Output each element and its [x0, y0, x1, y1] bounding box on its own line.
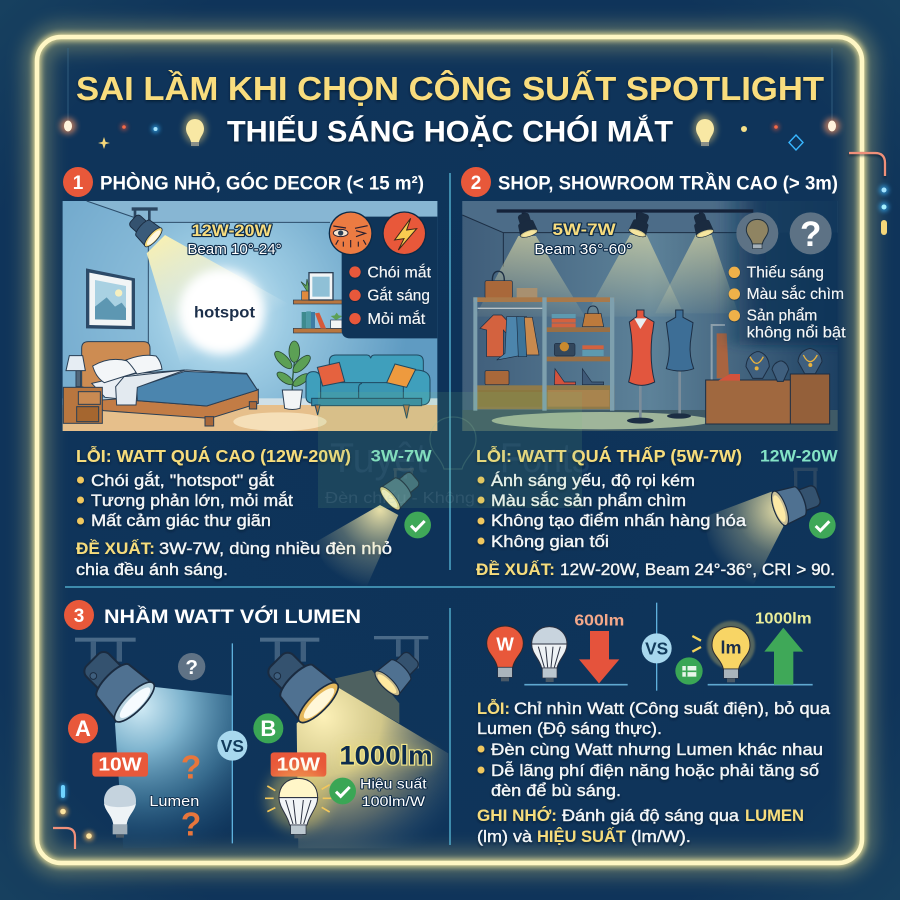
decorations: lights around title: [60, 48, 840, 150]
comparison illustration A vs B: [68, 636, 448, 848]
illustration: recommended spotlight 3W-7W: 3W-7W: [371, 447, 432, 466]
panel: section 2 shop: [64, 167, 858, 848]
text block: section 1 error and recommendation: [76, 445, 392, 579]
list: glare effects: Mỏi mắt: [367, 309, 426, 328]
sofa: [306, 355, 430, 418]
badge: 10W B: [271, 752, 326, 777]
text block: section 3 error and reminder: LỖI:: [477, 699, 510, 718]
badge: B: [253, 713, 283, 743]
illustration: recommended spotlight 3W-7W: [313, 447, 432, 587]
text block: section 3 error and reminder: HIỆU SUẤT: [537, 827, 627, 846]
watermark: Đèn chiếu - Không: [325, 490, 475, 507]
list: glare effects: [349, 262, 432, 328]
illustration: recommended spotlight 12W-20W: 12W-20W: [760, 447, 838, 466]
text block: section 2 error and recommendation: 12W-20W, Beam 24°-36°, CRI > 90.: [560, 560, 835, 579]
list: under-lighting effects: Màu sắc chìm: [747, 284, 844, 303]
badge: A: [68, 713, 98, 743]
decorations: right neon: [849, 153, 889, 235]
icon: grey bulb: [104, 785, 136, 838]
icon: bright bulb with rays: [265, 767, 331, 838]
heading: section 3: [64, 600, 361, 630]
divider lines: [65, 173, 835, 845]
heading: section 2: SHOP, SHOWROOM TRẦN CAO (> 3m): [498, 172, 838, 194]
heading: section 3: 3: [74, 606, 84, 627]
mannequin in red dress: [627, 310, 655, 424]
badge: VS: [217, 731, 247, 761]
text block: section 1 error and recommendation: chia đều ánh sáng.: [76, 560, 228, 579]
badge: VS: [642, 633, 672, 663]
label: 1000lm: 1000lm: [755, 610, 812, 627]
illustration: recommended spotlight 12W-20W: [703, 447, 838, 588]
title: THIẾU SÁNG HOẶC CHÓI MẮT: [227, 114, 673, 148]
label: wattage and beam: 12W-20W: [192, 221, 272, 240]
badge: A: A: [75, 716, 91, 741]
text block: section 3 error and reminder: Đánh giá độ sáng qua: [562, 806, 740, 825]
bedside table with lamp: [63, 356, 102, 423]
heading: section 3: NHẦM WATT VỚI LUMEN: [104, 606, 361, 628]
text block: section 1 error and recommendation: LỖI: WATT QUÁ CAO (12W-20W): [76, 445, 351, 466]
picture on wall: [86, 268, 135, 329]
text block: section 2 error and recommendation: Không tạo điểm nhấn hàng hóa: [491, 511, 747, 530]
badge: B: B: [260, 716, 276, 741]
text block: section 3 error and reminder: Lumen (Độ sáng thực).: [477, 719, 662, 738]
list: glare effects: Chói mắt: [367, 262, 432, 281]
panel: section 1 small room: [63, 167, 858, 848]
text block: section 3 error and reminder: Chỉ nhìn Watt (Công suất điện), bỏ qua: [514, 699, 831, 718]
label: wattage and beam: [534, 220, 632, 258]
text block: section 3 error and reminder: (lm/W).: [631, 827, 691, 846]
text block: section 3 error and reminder: Dễ lãng phí điện năng hoặc phải tăng số: [491, 761, 820, 780]
question marks: ?: [181, 749, 201, 786]
watermark: Tuyệt: [330, 434, 427, 481]
badge: 10W B: 10W: [277, 753, 320, 774]
heading: section 1: PHÒNG NHỎ, GÓC DECOR (< 15 m²): [100, 172, 424, 194]
badge: 10W A: [92, 752, 148, 777]
overlay: fade right: [720, 201, 838, 350]
text block: section 2 error and recommendation: ĐỀ XUẤT:: [476, 560, 555, 579]
list: glare effects: Gắt sáng: [367, 286, 430, 305]
label: wattage and beam: Beam 36°-60°: [534, 241, 632, 258]
divider: [230, 643, 234, 843]
plant: [272, 341, 313, 409]
panel: section 3 watt vs lumen: [64, 392, 831, 848]
label: wattage and beam: 5W-7W: [552, 220, 616, 239]
title: [76, 69, 824, 148]
track with spotlights: [497, 209, 753, 239]
text block: section 1 error and recommendation: Mất cảm giác thư giãn: [91, 511, 271, 530]
illustration: 600lm vs 1000lm bulbs: [487, 603, 813, 691]
label: efficiency: Hiệu suất: [360, 775, 427, 791]
label: 600lm: 600lm: [574, 613, 624, 630]
label: hotspot: hotspot: [194, 304, 256, 321]
icon: dazzled eye: [329, 211, 373, 255]
text block: section 1 error and recommendation: Chói gắt, "hotspot" gắt: [91, 471, 274, 490]
text block: section 3 error and reminder: đèn để bù sáng.: [491, 781, 621, 800]
dark info panel: [342, 217, 437, 338]
label: wattage and beam: Beam 10°-24°: [187, 241, 282, 258]
icon: watt bulb: [487, 626, 523, 681]
list: under-lighting effects: Sản phẩm: [747, 307, 817, 325]
display tables with jewellery: [706, 325, 830, 424]
badge: VS: VS: [221, 736, 244, 756]
label: 1000lm: 1000lm: [339, 740, 433, 770]
spotlight B: [258, 638, 344, 728]
label: 1000lm: 1000lm: [339, 740, 433, 770]
spotlight: [125, 207, 165, 249]
shelves: [293, 273, 347, 333]
icon: left title bulb: [183, 114, 207, 146]
decorations: bottom-left neon: [53, 784, 94, 849]
bed: [82, 342, 258, 426]
beams: [115, 670, 448, 848]
icon: lumen bulb: lm: [720, 637, 741, 657]
list: under-lighting effects: Thiếu sáng: [747, 264, 824, 281]
badge: VS: VS: [645, 639, 668, 659]
illustration: bedroom with hotspot: [63, 201, 437, 431]
list: under-lighting effects: [729, 264, 846, 342]
watermark: [318, 392, 590, 508]
icon: watt bulb: W: [496, 634, 514, 655]
text block: section 2 error and recommendation: Màu sắc sản phẩm chìm: [491, 491, 686, 510]
title: SAI LẦM KHI CHỌN CÔNG SUẤT SPOTLIGHT: [76, 69, 824, 107]
icon: grey question: ?: [185, 656, 198, 679]
icon: rays and green badge: [675, 636, 703, 685]
spotlight B small: [372, 636, 428, 699]
label: lumen: Lumen: [149, 794, 199, 810]
mannequin in blue: [666, 310, 694, 419]
question marks: ?: [181, 806, 201, 843]
text block: section 3 error and reminder: LUMEN: [745, 806, 804, 825]
text block: section 3 error and reminder: [477, 699, 831, 846]
watermark: Fonts: [500, 434, 590, 481]
icon: right title bulb: [693, 114, 717, 146]
text block: section 1 error and recommendation: 3W-7W, dùng nhiều đèn nhỏ: [159, 539, 392, 558]
heading: section 1: [63, 167, 424, 197]
icon: ribbed bulb: [532, 627, 567, 682]
arrow: up: [764, 628, 803, 685]
shelving unit: [473, 271, 614, 411]
heading: section 2: [461, 167, 838, 197]
heading: section 1: 1: [73, 173, 84, 194]
text block: section 2 error and recommendation: [476, 445, 835, 579]
icon: dim bulb: [736, 212, 778, 254]
text block: section 1 error and recommendation: ĐỀ XUẤT:: [76, 539, 155, 558]
icon: green check: [329, 778, 356, 804]
necklace busts: [746, 348, 822, 381]
icon: question: [790, 212, 832, 254]
text block: section 3 error and reminder: (lm) và: [477, 827, 533, 846]
arrow: down: [579, 631, 619, 683]
text block: section 3 error and reminder: GHI NHỚ:: [477, 806, 557, 825]
label: efficiency: [360, 775, 427, 809]
icon: grey question: [178, 653, 205, 680]
icon: question: ?: [800, 215, 821, 254]
illustration: dim showroom: [462, 190, 858, 431]
label: wattage and beam: [187, 221, 282, 258]
text block: section 2 error and recommendation: LỖI: WATT QUÁ THẤP (5W-7W): [476, 445, 742, 466]
text block: section 1 error and recommendation: Tương phản lớn, mỏi mắt: [91, 491, 293, 510]
label: efficiency: 100lm/W: [362, 793, 426, 809]
spotlight A: [74, 638, 160, 727]
icon: lightning: [382, 211, 426, 255]
text block: section 2 error and recommendation: Không gian tối: [491, 532, 609, 551]
question marks: [181, 749, 201, 843]
text block: section 2 error and recommendation: Ánh sáng yếu, độ rọi kém: [491, 471, 695, 490]
list: under-lighting effects: không nổi bật: [747, 324, 846, 342]
text block: section 3 error and reminder: Đèn cùng Watt nhưng Lumen khác nhau: [491, 740, 823, 759]
heading: section 2: 2: [471, 173, 481, 194]
badge: 10W A: 10W: [98, 753, 142, 774]
icon: lumen bulb: [707, 621, 755, 682]
